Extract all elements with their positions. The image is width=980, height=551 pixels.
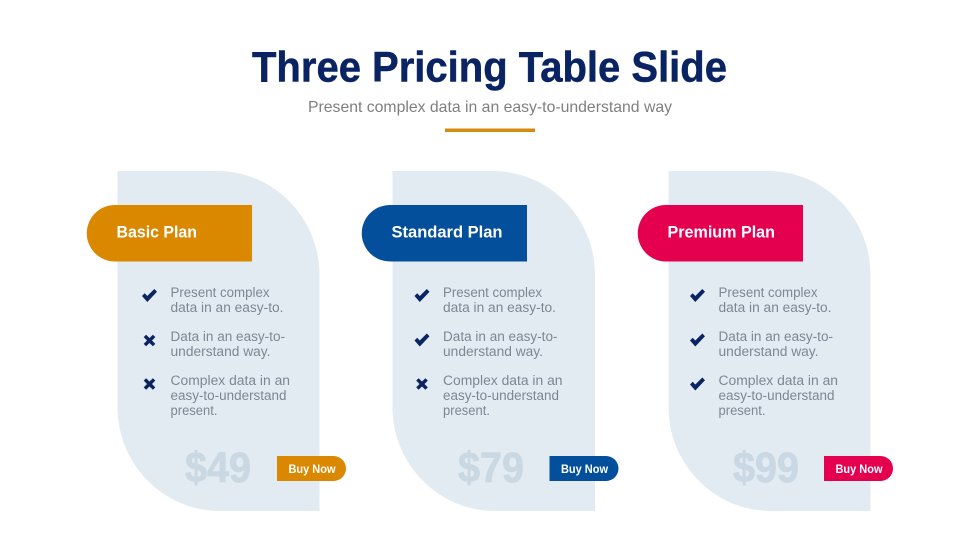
price: $99 [733, 445, 799, 492]
icon: cross [144, 378, 155, 390]
buy label: Buy Now [561, 464, 608, 476]
panel background [392, 171, 595, 511]
feature 1: Present complex [170, 285, 270, 300]
plan tag [638, 205, 803, 262]
price: $49 [185, 445, 251, 492]
feature 2: Data in an easy-to- [443, 329, 558, 344]
plan name: Standard Plan [392, 222, 502, 242]
panel background [118, 171, 320, 511]
icon: check [142, 289, 157, 302]
feature 3: Complex data in an [443, 373, 562, 388]
plan tag [362, 205, 527, 262]
buy button [824, 456, 893, 481]
icon: check [414, 289, 430, 302]
panel: standard plan [362, 171, 618, 511]
panel: basic plan [87, 171, 346, 511]
price: $79 [458, 445, 524, 492]
feature 3: present. [718, 403, 766, 418]
feature 3: present. [170, 403, 218, 418]
panel background [668, 171, 870, 511]
feature 3: easy-to-understand [170, 388, 286, 403]
icon: check [414, 334, 430, 346]
plan name: Premium Plan [668, 222, 775, 242]
buy label: Buy Now [288, 464, 336, 476]
title accent line [445, 128, 535, 132]
plan name: Basic Plan [116, 222, 197, 242]
feature 3: easy-to-understand [718, 388, 834, 403]
title: Three Pricing Table Slide [252, 44, 727, 92]
feature 2: understand way. [170, 344, 270, 359]
feature 2: understand way. [718, 344, 818, 359]
feature 3: present. [443, 403, 490, 418]
buy button [277, 456, 346, 481]
icon: check [690, 289, 705, 302]
feature 2: understand way. [443, 344, 543, 359]
icon: check [690, 378, 705, 390]
feature 1: Present complex [443, 285, 542, 300]
panel: premium plan [638, 171, 893, 511]
feature 1: Present complex [718, 285, 818, 300]
icon: cross [416, 378, 428, 390]
feature 2: Data in an easy-to- [718, 329, 833, 344]
buy label: Buy Now [836, 464, 883, 476]
feature 1: data in an easy-to. [170, 300, 284, 315]
feature 2: Data in an easy-to- [170, 329, 285, 344]
icon: check [690, 334, 705, 346]
subtitle: Present complex data in an easy-to-understand way [308, 99, 672, 116]
feature 3: Complex data in an [718, 373, 838, 388]
feature 1: data in an easy-to. [443, 300, 556, 315]
plan tag [87, 205, 252, 262]
feature 1: data in an easy-to. [718, 300, 832, 315]
buy button [550, 456, 618, 481]
feature 3: easy-to-understand [443, 388, 559, 403]
feature 3: Complex data in an [170, 373, 290, 388]
icon: cross [144, 335, 155, 346]
